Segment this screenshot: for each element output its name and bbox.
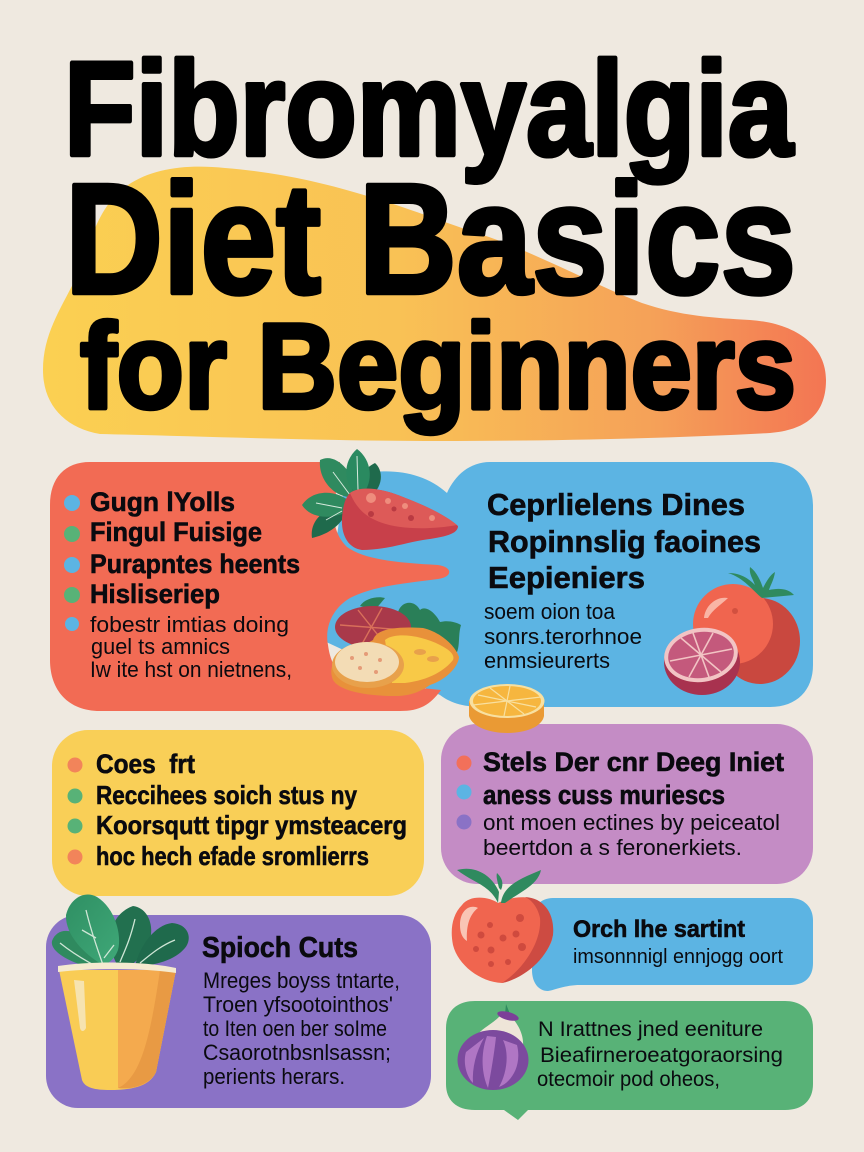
spinach body text: Csaorotnbsnlsassn;: [203, 1040, 391, 1065]
blue panel heading: Ceprlielens Dines: [487, 487, 745, 522]
yellow panel text: [96, 749, 407, 871]
green note text: Bieafirneroeatgoraorsing: [540, 1044, 783, 1067]
red panel bold list: Gugn lYolls: [90, 487, 235, 517]
icon: orange slice: [469, 684, 544, 733]
red panel body text: guel ts amnics: [91, 634, 230, 659]
icon: tomato and grapefruit: [661, 567, 800, 695]
yellow panel text: hoc hech efade sromlierrs: [96, 841, 369, 871]
title: for Beginners: [80, 298, 796, 434]
panel: red list: [50, 462, 449, 711]
panel: blue tips: [322, 462, 813, 707]
red panel body text: fobestr imtias doing: [90, 612, 289, 637]
spinach body text: [203, 968, 400, 1089]
yellow panel bullets: [68, 758, 82, 864]
panel: pink-purple list: [441, 724, 813, 884]
blue panel body text: [484, 599, 642, 673]
spinach heading: Spioch Cuts: [202, 932, 358, 964]
pink panel bullets: [456, 756, 472, 830]
red panel bullets: [64, 495, 80, 631]
red panel bold list: Hisliseriep: [90, 579, 220, 609]
note heading: Orch lhe sartint: [573, 916, 745, 943]
icon: spinach in yellow cup: [52, 894, 189, 1090]
blue panel body text: sonrs.terorhnoe: [484, 624, 642, 649]
yellow panel text: Reccihees soich stus ny: [96, 780, 357, 810]
note body text: imsonnnigl ennjogg oort: [573, 946, 783, 968]
spinach body text: Mreges boyss tntarte,: [203, 968, 400, 993]
green note text: [537, 1018, 783, 1091]
blue panel heading: Eepieniers: [488, 560, 645, 595]
pink panel text: Stels Der cnr Deeg Iniet: [483, 747, 784, 777]
red panel bold list: Fingul Fuisige: [90, 517, 262, 547]
panel: blue speech note: [532, 898, 813, 991]
icon: strawberry apple: [452, 869, 553, 983]
icon: carrot with leaves: [302, 449, 458, 550]
spinach body text: to Iten oen ber soIme: [203, 1016, 387, 1041]
red panel bold list: [90, 487, 300, 609]
red panel bold list: Purapntes heents: [90, 549, 300, 579]
pink panel text: aness cuss muriescs: [483, 780, 725, 810]
blue panel body text: enmsieurerts: [484, 648, 610, 673]
yellow panel text: Coes frt: [96, 749, 195, 779]
icon: purple fig: [458, 1004, 528, 1090]
blue panel heading: Ropinnslig faoines: [488, 524, 761, 559]
green note text: N Irattnes jned eeniture: [538, 1018, 763, 1041]
title: [64, 35, 796, 434]
pink panel text: beertdon a s feronerkiets.: [483, 835, 742, 860]
panel: yellow list: [52, 730, 424, 896]
red panel body text: [90, 612, 292, 682]
blue panel body text: soem oion toa: [484, 599, 616, 624]
pink panel text: ont moen ectines by peiceatol: [483, 810, 780, 835]
panel: green note: [446, 1001, 813, 1120]
pink panel text: [483, 747, 784, 860]
green note text: otecmoir pod oheos,: [537, 1068, 720, 1091]
red panel body text: Iw ite hst on nietnens,: [90, 657, 292, 682]
spinach body text: Troen yfsootointhos': [203, 992, 393, 1017]
spinach body text: perients herars.: [203, 1064, 345, 1089]
title backdrop blob: [43, 167, 826, 441]
yellow panel text: Koorsqutt tipgr ymsteacerg: [96, 810, 407, 840]
blue panel heading: [487, 487, 761, 595]
panel: spinach cuts: [46, 915, 431, 1108]
icon: sliced food plate: [331, 597, 461, 696]
